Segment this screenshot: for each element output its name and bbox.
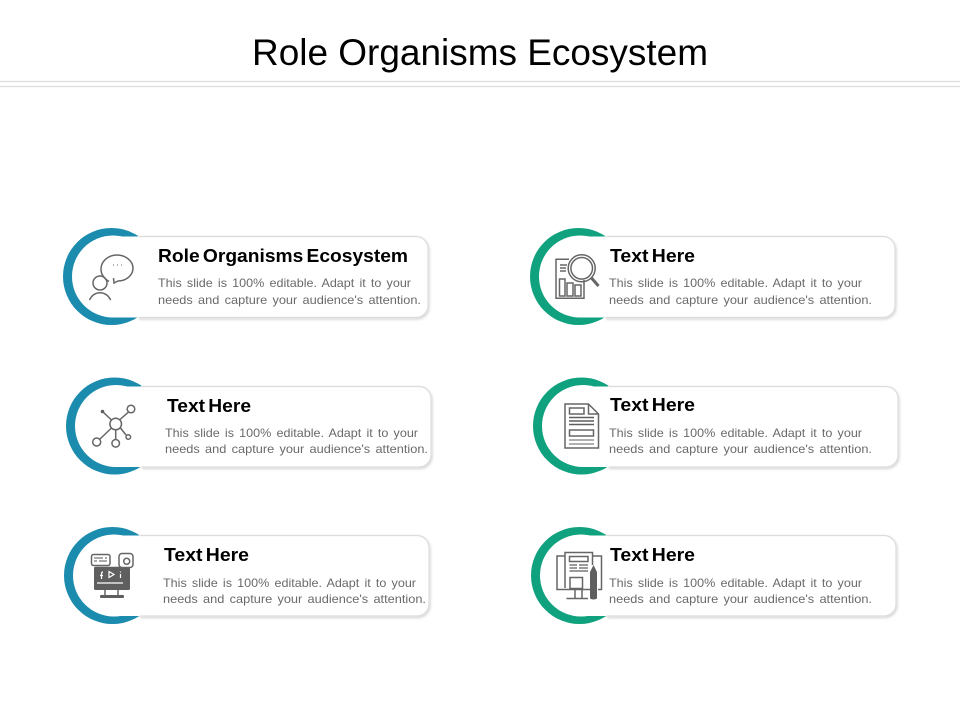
text block: This slide is 100% editable. Adapt it to your	[165, 426, 418, 440]
icon: monitor with media	[92, 554, 133, 598]
text block: needs and capture your audience's attention.	[609, 592, 872, 606]
text block	[609, 576, 872, 606]
panel: analysis item	[530, 228, 895, 325]
panel: role organisms ecosystem	[63, 228, 428, 325]
text block	[158, 276, 421, 307]
header rule	[0, 82, 960, 86]
icon: person with speech bubble	[90, 255, 133, 300]
heading: Role Organisms Ecosystem	[158, 245, 408, 266]
text block: This slide is 100% editable. Adapt it to your	[609, 426, 862, 440]
panel: network item	[66, 378, 431, 474]
text block: This slide is 100% editable. Adapt it to your	[158, 276, 411, 290]
heading: Text Here	[610, 245, 695, 266]
text block: This slide is 100% editable. Adapt it to your	[609, 276, 862, 290]
icon: report with magnifier	[556, 255, 598, 298]
icon: document	[565, 404, 598, 448]
icon: monitor, paper and pencil	[557, 552, 602, 600]
text block: needs and capture your audience's attention.	[609, 293, 872, 307]
text block: This slide is 100% editable. Adapt it to your	[609, 576, 862, 590]
heading: Text Here	[610, 394, 695, 415]
text block: needs and capture your audience's attention.	[163, 592, 426, 606]
icon: network nodes	[93, 405, 135, 447]
panel: document item	[533, 378, 898, 474]
text block	[609, 426, 872, 456]
text block: needs and capture your audience's attention.	[609, 442, 872, 456]
text block: needs and capture your audience's attention.	[158, 293, 421, 307]
title: Role Organisms Ecosystem	[252, 31, 708, 73]
panel: media item	[64, 527, 429, 624]
text block: This slide is 100% editable. Adapt it to your	[163, 576, 416, 590]
text block	[609, 276, 872, 307]
panel: writing item	[531, 527, 896, 624]
heading: Text Here	[610, 544, 695, 565]
heading: Text Here	[164, 544, 249, 565]
text block	[165, 426, 428, 456]
heading: Text Here	[167, 395, 251, 416]
text block: needs and capture your audience's attention.	[165, 442, 428, 456]
text block	[163, 576, 426, 606]
